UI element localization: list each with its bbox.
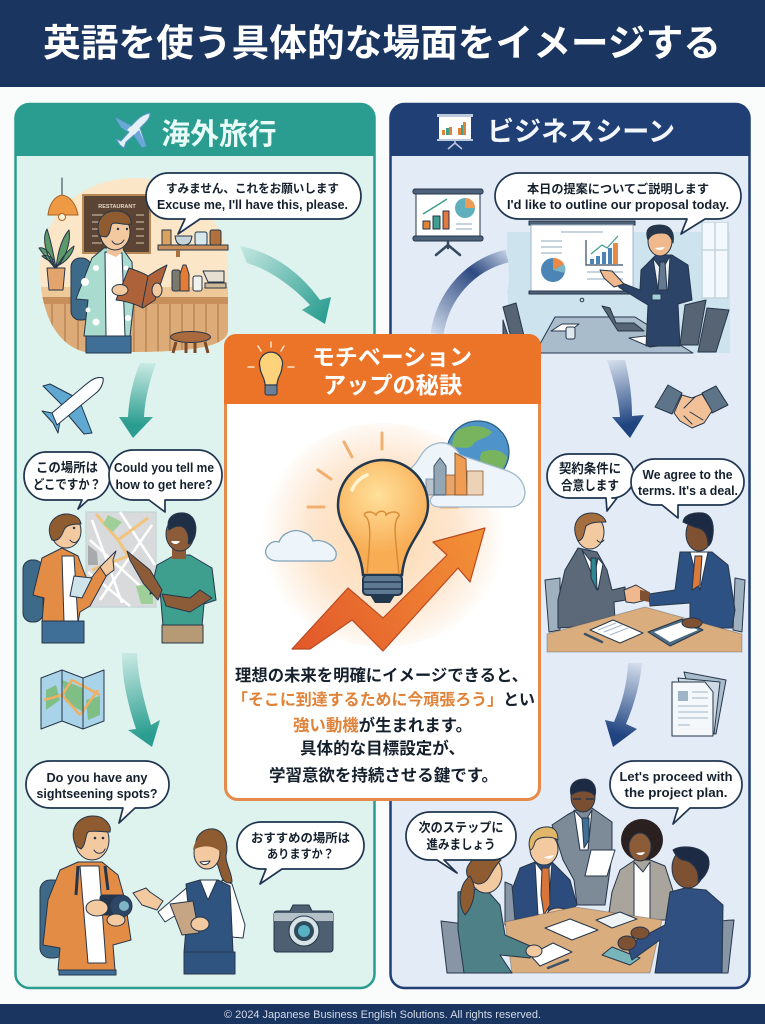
icon: left cloud — [266, 531, 336, 561]
arrow: down to team meeting — [605, 663, 642, 747]
icon: folded map — [41, 670, 104, 729]
body text — [232, 666, 535, 785]
speech bubble: sightseeing spots — [26, 761, 169, 823]
icon: globe — [447, 421, 509, 483]
speech bubble: proposal — [495, 173, 741, 234]
speech bubble: proposal: 本日の提案についてご説明します — [527, 181, 709, 196]
speech bubble: we agree: terms. It's a deal. — [638, 483, 738, 498]
traveller pointing at map — [23, 514, 116, 643]
arrow: down to sightseeing — [122, 653, 160, 747]
speech bubble: next step: 進みましょう — [426, 837, 496, 852]
icon: presentation board — [413, 189, 483, 255]
icon: big cloud — [408, 443, 525, 507]
icon: documents — [672, 672, 726, 736]
speech bubble: next step — [406, 812, 516, 873]
cafe background — [38, 178, 230, 354]
icon: airplane — [42, 378, 103, 434]
panel header: motivation — [224, 334, 541, 404]
potted plant — [39, 229, 74, 290]
panel: business scene — [390, 103, 750, 988]
menu board: RESTAURANT — [98, 204, 136, 210]
panel header: overseas travel — [15, 103, 375, 156]
speech bubble: where is this: どこですか？ — [33, 477, 101, 492]
speech bubble: could you tell me: how to get here? — [116, 477, 213, 492]
footer bar: © 2024 Japanese Business English Solutions. All rights reserved. — [224, 1009, 541, 1021]
presenter — [600, 225, 692, 346]
heading: motivation secrets: アップの秘訣 — [323, 372, 462, 398]
icon: camera — [274, 905, 333, 952]
chairs — [441, 882, 734, 973]
counter bottles and pot — [172, 265, 226, 291]
meeting room background — [507, 222, 730, 353]
body text: 理想の未来を明確にイメージできると、 — [235, 666, 528, 685]
speech bubble: sightseeing spots: Do you have any — [46, 770, 148, 785]
panel: overseas travel — [15, 103, 375, 988]
panel: motivation tip — [224, 334, 541, 800]
rays — [308, 433, 458, 507]
conference chairs — [503, 300, 729, 352]
body text: 具体的な目標設定が、 — [300, 739, 465, 758]
icon: small bulb — [248, 342, 294, 395]
illustration: bulb and growth arrow — [261, 421, 525, 651]
icon: city buildings — [426, 453, 483, 495]
speech bubble: where is this: この場所は — [36, 460, 98, 475]
speech bubble: excuse me: すみません、これをお願いします — [166, 182, 339, 196]
body text: 「そこに到達するために今頑張ろう」とい — [232, 690, 535, 709]
speech bubble: project plan: Let's proceed with — [620, 769, 733, 784]
chairs — [545, 578, 745, 632]
arrow: cafe to motivation — [240, 246, 331, 324]
heading: motivation secrets — [312, 344, 472, 398]
menu board — [83, 195, 150, 253]
speech bubble: agree terms japanese — [547, 454, 634, 511]
icon: header airplane — [116, 113, 150, 148]
scene: asking directions — [23, 450, 222, 643]
growth arrow — [292, 528, 485, 651]
speech bubble: excuse me: Excuse me, I'll have this, please. — [157, 197, 348, 212]
speech bubble: agree terms japanese: 契約条件に — [559, 461, 621, 476]
speech bubble: sightseeing spots: sightseening spots? — [36, 786, 158, 801]
speech bubble: where is this — [24, 452, 110, 509]
title banner: 英語を使う具体的な場面をイメージする — [43, 22, 721, 64]
speech bubble: proposal: I'd like to outline our proposal today. — [507, 197, 729, 212]
businessman left — [558, 513, 626, 628]
colleague seen from behind left — [458, 854, 542, 973]
speech bubble: we agree — [631, 459, 744, 518]
arrow: down to map scene — [119, 363, 156, 438]
table with contracts — [547, 607, 742, 652]
standing colleague — [552, 779, 615, 905]
conference table — [535, 306, 693, 353]
speech bubble: could you tell me: Could you tell me — [114, 460, 214, 475]
local guide pointing at map — [127, 513, 216, 643]
heading: motivation secrets: モチベーション — [312, 344, 472, 370]
stool — [170, 332, 210, 353]
speech bubble: agree terms japanese: 合意します — [561, 478, 619, 493]
body text: 学習意欲を持続させる鍵です。 — [269, 766, 498, 785]
city map — [86, 512, 156, 607]
scene: negotiation — [545, 454, 745, 652]
scene: team meeting — [406, 761, 742, 973]
scene: presentation — [495, 173, 741, 353]
speech bubble: we agree: We agree to the — [642, 467, 732, 482]
body text: 強い動機が生まれます。 — [293, 716, 472, 735]
icon: header chart board — [437, 114, 473, 149]
speech bubble: recommended places: ありますか？ — [267, 847, 334, 861]
tourist with camera — [40, 816, 132, 975]
speech bubble: excuse me — [146, 173, 361, 234]
speech bubble: project plan — [610, 761, 742, 824]
title banner — [0, 0, 765, 87]
traveller reading menu — [71, 211, 167, 353]
speech bubble: recommended places: おすすめの場所は — [251, 830, 350, 845]
man seen from behind right — [618, 847, 723, 973]
heading: ビジネスシーン: ビジネスシーン — [487, 117, 675, 147]
projection screen — [529, 221, 635, 302]
speech bubble: could you tell me — [109, 450, 222, 512]
shelf and jars — [158, 230, 228, 257]
scene: sightseeing advice — [26, 761, 364, 975]
bright bulb — [338, 460, 428, 603]
arrow: presentation to motivation — [437, 256, 507, 334]
tourist info staff — [133, 829, 245, 974]
shaking hands — [624, 585, 650, 603]
scene: cafe traveller — [38, 173, 361, 354]
panel header: business scene — [390, 103, 750, 156]
footer bar — [0, 1004, 765, 1024]
arrow: down to negotiation — [607, 360, 644, 438]
colleague with afro — [608, 819, 676, 920]
meeting table — [505, 907, 662, 973]
businessman right — [649, 513, 735, 628]
speech bubble: recommended places — [237, 822, 364, 884]
blond man — [510, 827, 577, 922]
heading: 海外旅行: 海外旅行 — [162, 118, 276, 151]
speech bubble: next step: 次のステップに — [418, 820, 504, 835]
hanging lamp — [48, 178, 78, 220]
speech bubble: project plan: the project plan. — [624, 785, 728, 800]
icon: handshake — [655, 385, 728, 428]
